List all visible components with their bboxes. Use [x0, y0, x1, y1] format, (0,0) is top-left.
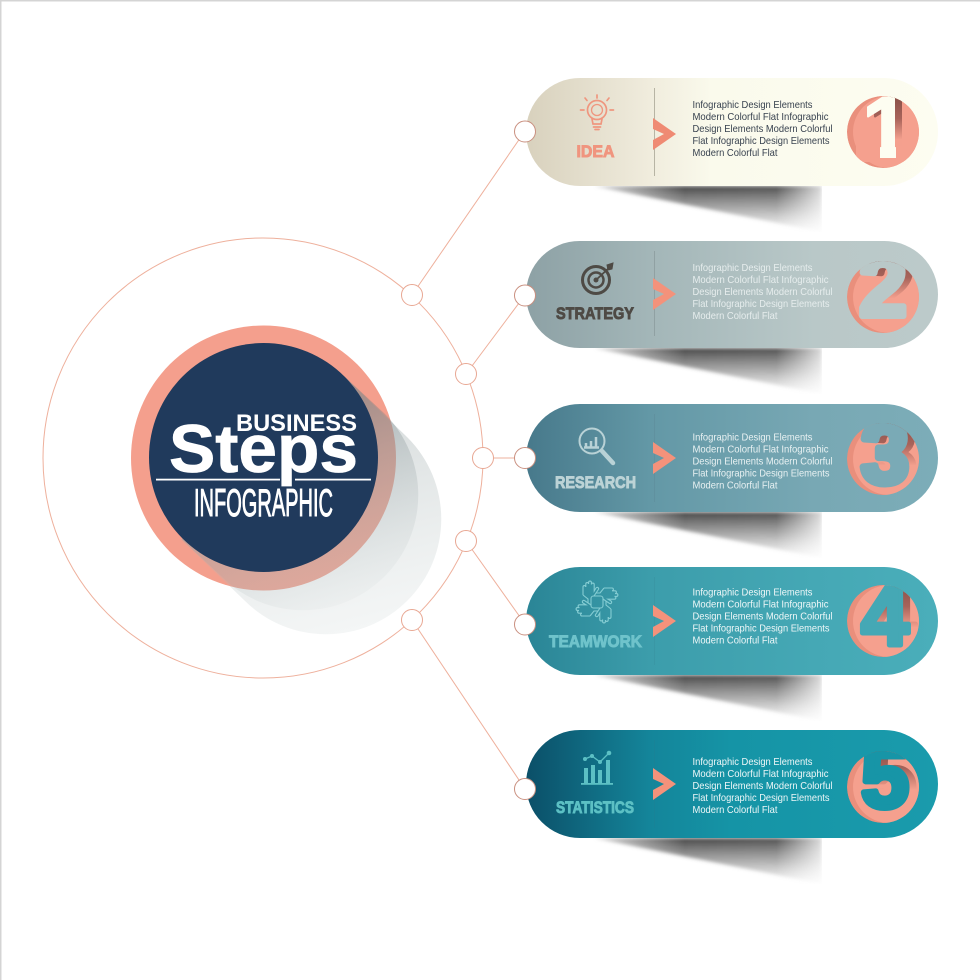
- divider: [654, 88, 656, 176]
- panel: step 3 research: [514, 404, 938, 558]
- body text: Infographic Design Elements: [692, 588, 812, 598]
- divider: [654, 577, 656, 665]
- attachment node: [514, 778, 536, 800]
- attachment node: [514, 614, 536, 635]
- pill background: [526, 567, 938, 675]
- pill shadow: [598, 838, 822, 879]
- attachment node: [514, 285, 536, 306]
- panel: step 2 strategy: [514, 239, 938, 394]
- body text: [692, 263, 832, 322]
- icon: magnifier: [580, 428, 613, 463]
- pill shadow: [598, 675, 822, 716]
- number 3: 3: [861, 406, 909, 502]
- large outline ring: [43, 238, 483, 678]
- number 4: 4: [868, 568, 916, 664]
- number 5: 5: [861, 730, 909, 826]
- number 1: 1: [862, 80, 910, 176]
- inner long shadow: [182, 376, 418, 610]
- body text: Design Elements Modern Colorful: [692, 612, 832, 622]
- ring nodes: [402, 284, 494, 630]
- body text: [692, 757, 832, 816]
- body text: Flat Infographic Design Elements: [692, 624, 830, 634]
- body text: [692, 588, 832, 646]
- body text: Infographic Design Elements: [692, 757, 812, 768]
- body text: [692, 100, 832, 159]
- number 5: [847, 751, 919, 823]
- number 5: 5: [868, 730, 916, 826]
- label: STRATEGY: [556, 304, 635, 323]
- title divider: [156, 479, 371, 480]
- body text: Design Elements Modern Colorful: [692, 781, 832, 792]
- pill background: [526, 78, 938, 186]
- number 3: [847, 423, 919, 495]
- label: STATISTICS: [556, 798, 634, 817]
- body text: Infographic Design Elements: [692, 432, 812, 444]
- number 1: 1: [869, 80, 917, 176]
- panel: central badge: [131, 326, 441, 634]
- divider: [654, 414, 656, 502]
- number 2: [847, 261, 919, 333]
- pill shadow: [598, 348, 822, 389]
- body text: Modern Colorful Flat Infographic: [692, 444, 828, 456]
- pill shadow: [598, 512, 822, 553]
- pill background: [526, 241, 938, 348]
- outer long shadow: [182, 376, 441, 634]
- number 3: 3: [868, 406, 916, 502]
- salmon disc: [131, 326, 396, 590]
- body text: Modern Colorful Flat: [692, 636, 778, 646]
- body text: Modern Colorful Flat Infographic: [692, 275, 828, 286]
- attachment node: [514, 448, 536, 468]
- icon: hands: [576, 581, 618, 623]
- icon: light bulb: [580, 95, 614, 130]
- arrow: [653, 442, 676, 474]
- body text: Design Elements Modern Colorful: [692, 456, 832, 468]
- title: infographic: INFOGRAPHIC: [194, 482, 333, 525]
- body text: Modern Colorful Flat: [692, 311, 778, 322]
- navy disc: [149, 343, 378, 572]
- title: business: BUSINESS: [236, 410, 357, 437]
- body text: Flat Infographic Design Elements: [692, 136, 830, 147]
- panel: step 1 idea: [514, 78, 938, 232]
- pill background: [526, 730, 938, 838]
- number 4: 4: [861, 568, 909, 664]
- icon: target: [582, 263, 613, 294]
- body text: Design Elements Modern Colorful: [692, 287, 832, 298]
- body text: Modern Colorful Flat: [692, 148, 778, 159]
- panel: step 5 statistics: [514, 730, 938, 884]
- body text: Modern Colorful Flat Infographic: [692, 600, 828, 610]
- arrow: [653, 118, 676, 150]
- label: TEAMWORK: [549, 632, 643, 651]
- divider: [654, 251, 656, 336]
- pill shadow: [598, 186, 822, 227]
- number 2: 2: [866, 239, 914, 335]
- attachment node: [514, 121, 536, 142]
- label: RESEARCH: [555, 473, 636, 492]
- title: steps: Steps: [169, 411, 358, 487]
- body text: [692, 432, 832, 492]
- body text: Flat Infographic Design Elements: [692, 299, 830, 310]
- arrow: [653, 605, 676, 637]
- body text: Flat Infographic Design Elements: [692, 468, 830, 480]
- divider: [654, 740, 656, 828]
- body text: Infographic Design Elements: [692, 100, 812, 111]
- connector lines: [412, 131, 525, 789]
- body text: Modern Colorful Flat Infographic: [692, 769, 828, 780]
- panel: step 4 teamwork: [514, 567, 938, 721]
- number 4: [847, 585, 919, 657]
- pill background: [526, 404, 938, 512]
- body text: Flat Infographic Design Elements: [692, 793, 830, 804]
- label: IDEA: [576, 142, 614, 161]
- body text: Design Elements Modern Colorful: [692, 124, 832, 135]
- icon: bar chart: [581, 751, 613, 785]
- number 1: [847, 96, 919, 168]
- body text: Infographic Design Elements: [692, 263, 812, 274]
- arrow: [653, 278, 676, 310]
- arrow: [653, 768, 676, 800]
- number 2: 2: [859, 239, 907, 335]
- body text: Modern Colorful Flat: [692, 805, 778, 816]
- body text: Modern Colorful Flat Infographic: [692, 112, 828, 123]
- body text: Modern Colorful Flat: [692, 480, 778, 492]
